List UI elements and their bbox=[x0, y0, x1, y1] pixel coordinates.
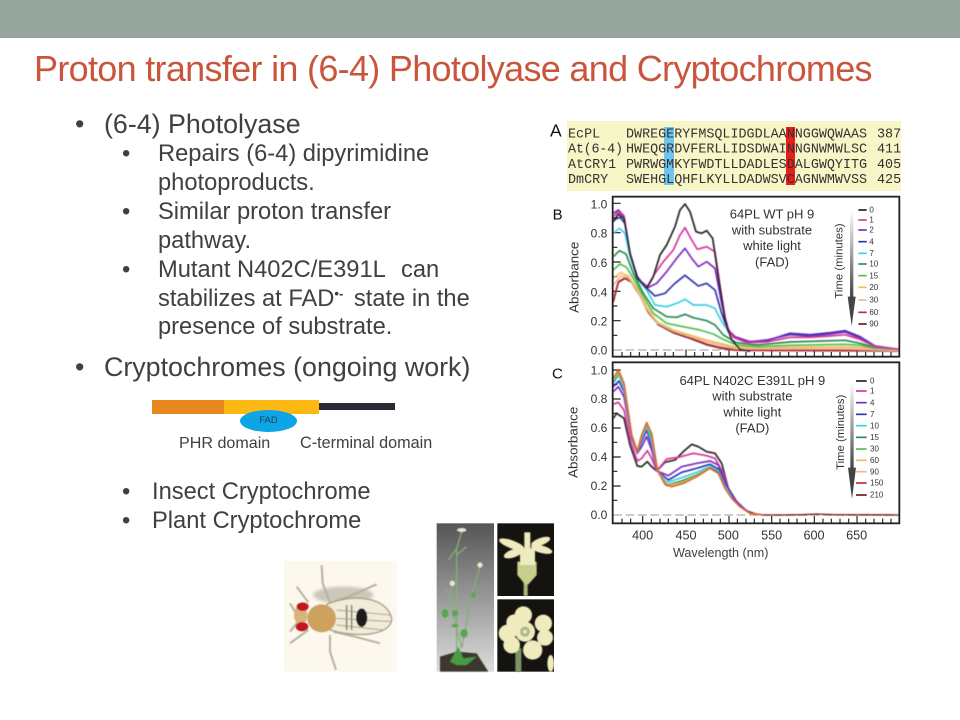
panel B: absorbance chart WT: 4 bbox=[869, 237, 874, 246]
panel C: absorbance chart mutant: 90 bbox=[870, 467, 879, 476]
panel B: absorbance chart WT: Absorbance bbox=[567, 242, 582, 313]
panel A: sequence alignment: DmCRY bbox=[568, 173, 608, 188]
panel A: sequence alignment: 405 bbox=[877, 158, 901, 173]
panel C: absorbance chart mutant bbox=[552, 361, 900, 542]
panel A: sequence alignment: PWRWGMKYFWDTLLDADLESDALGWQYITG bbox=[626, 158, 867, 173]
panel C: absorbance chart mutant: (FAD) bbox=[735, 421, 769, 436]
panel A: sequence alignment: SWEHGLQHFLKYLLDADWSVCAGNWMWVSS bbox=[626, 173, 867, 188]
plant whole bbox=[437, 523, 494, 672]
panel C: absorbance chart mutant: 10 bbox=[870, 421, 879, 430]
text block: (6-4) photolyase bullets: Mutant N402C/E391L can bbox=[158, 257, 439, 283]
panel B: absorbance chart WT: 0.2 bbox=[591, 315, 608, 329]
FAD ellipse: FAD bbox=[259, 415, 278, 426]
panel A: sequence alignment: EcPL bbox=[568, 128, 600, 142]
panel C: absorbance chart mutant: white light bbox=[722, 404, 782, 419]
panel C: absorbance chart mutant: 15 bbox=[870, 433, 879, 442]
text block: (6-4) photolyase bullets: Similar proton transfer bbox=[158, 199, 391, 225]
text block: (6-4) photolyase bullets: (6-4) Photolyase bbox=[104, 109, 301, 139]
panel C: absorbance chart mutant: 150 bbox=[870, 479, 884, 488]
text block: (6-4) photolyase bullets: Repairs (6-4) dipyrimidine bbox=[158, 141, 429, 167]
C-terminal bar bbox=[319, 403, 395, 410]
panel C: absorbance chart mutant: with substrate bbox=[711, 389, 792, 404]
panel C: absorbance chart mutant: 550 bbox=[761, 528, 782, 542]
flower top view bbox=[497, 599, 554, 672]
panel A: sequence alignment: AtCRY1 bbox=[568, 158, 616, 173]
panel B: absorbance chart WT: 15 bbox=[869, 271, 879, 280]
panel B: absorbance chart WT: Time (minutes) bbox=[833, 223, 845, 299]
panel C: absorbance chart mutant: 0 bbox=[870, 377, 875, 386]
panel B: absorbance chart WT: 0.4 bbox=[591, 285, 608, 299]
text block: cryptochromes heading: Cryptochromes (ongoing work) bbox=[104, 352, 470, 382]
panel A: sequence alignment: 387 bbox=[877, 128, 901, 142]
panel C: absorbance chart mutant: 0.6 bbox=[591, 421, 608, 435]
panel C: absorbance chart mutant: 60 bbox=[870, 456, 879, 465]
panel B: absorbance chart WT: 2 bbox=[869, 226, 874, 235]
panel A: sequence alignment: At(6-4) bbox=[568, 142, 623, 158]
title: Proton transfer in (6-4) Photolyase and Cryptochromes bbox=[34, 48, 872, 89]
x axis label: Wavelength (nm) bbox=[673, 546, 768, 560]
text block: cryptochrome types: • bbox=[122, 479, 130, 505]
panel C: absorbance chart mutant: 1.0 bbox=[591, 363, 608, 377]
panel B: absorbance chart WT: 64PL WT pH 9 bbox=[730, 207, 814, 222]
text block: (6-4) photolyase bullets: • bbox=[122, 199, 130, 225]
panel C: absorbance chart mutant: 500 bbox=[718, 528, 739, 542]
text block: (6-4) photolyase bullets: • bbox=[122, 141, 130, 167]
panel C: absorbance chart mutant: 1 bbox=[870, 387, 875, 396]
panel B: absorbance chart WT: 10 bbox=[869, 260, 879, 269]
panel B: absorbance chart WT: with substrate bbox=[731, 222, 812, 237]
PHR yellow segment bbox=[224, 400, 319, 414]
panel A: sequence alignment: 425 bbox=[877, 173, 901, 188]
text block: cryptochrome types: • bbox=[122, 508, 130, 534]
panel C: absorbance chart mutant: 0.0 bbox=[591, 508, 608, 522]
panel C: absorbance chart mutant: 210 bbox=[870, 491, 884, 500]
text block: cryptochrome types: Plant Cryptochrome bbox=[152, 508, 361, 534]
text block: (6-4) photolyase bullets: • bbox=[75, 109, 84, 139]
panel B: absorbance chart WT: 60 bbox=[869, 308, 879, 317]
panel C: absorbance chart mutant: Time (minutes) bbox=[835, 395, 847, 470]
panel B: absorbance chart WT: 30 bbox=[869, 296, 879, 305]
panel C: absorbance chart mutant: Absorbance bbox=[566, 407, 581, 478]
panel A: sequence alignment: HWEQGRDVFERLLIDSDWAINNGNWMWLSC bbox=[626, 142, 867, 158]
panel C: absorbance chart mutant: 450 bbox=[675, 528, 697, 542]
panel A: sequence alignment: 411 bbox=[877, 142, 901, 158]
panel B: absorbance chart WT: (FAD) bbox=[755, 255, 789, 270]
panel C: absorbance chart mutant: C bbox=[552, 365, 563, 382]
panel C: absorbance chart mutant: 0.8 bbox=[591, 392, 608, 406]
text block: cryptochrome types bbox=[122, 479, 371, 534]
panel B: absorbance chart WT: 0 bbox=[869, 206, 874, 215]
panel C: absorbance chart mutant: 30 bbox=[870, 445, 879, 454]
panel C: absorbance chart mutant: 650 bbox=[846, 528, 867, 542]
PHR orange segment bbox=[152, 400, 224, 414]
panel B: absorbance chart WT: 0.8 bbox=[591, 227, 608, 241]
panel B: absorbance chart WT bbox=[553, 196, 900, 358]
panel A: sequence alignment: DWREGERYFMSQLIDGDLAANNGGWQWAAS bbox=[626, 128, 867, 142]
flower side view bbox=[497, 523, 554, 596]
panel B: absorbance chart WT: 7 bbox=[869, 249, 874, 258]
panel B: absorbance chart WT: 1.0 bbox=[591, 197, 608, 211]
PHR label: PHR domain bbox=[179, 434, 270, 452]
text block: (6-4) photolyase bullets: stabilizes at FAD•- state in the bbox=[158, 286, 470, 312]
text block: cryptochrome types: Insect Cryptochrome bbox=[152, 479, 371, 505]
panel A: sequence alignment bbox=[550, 120, 901, 191]
panel C: absorbance chart mutant: 600 bbox=[803, 528, 825, 542]
panel B: absorbance chart WT: 0.0 bbox=[591, 344, 608, 358]
text block: cryptochromes heading: • bbox=[75, 352, 84, 382]
panel A: sequence alignment: A bbox=[550, 120, 562, 140]
text block: (6-4) photolyase bullets: photoproducts. bbox=[158, 170, 315, 196]
panel C: absorbance chart mutant: 0.4 bbox=[591, 450, 608, 464]
panel C: absorbance chart mutant: 7 bbox=[870, 410, 875, 419]
panel C: absorbance chart mutant: 400 bbox=[632, 528, 653, 542]
C-terminal label: C-terminal domain bbox=[300, 434, 432, 452]
text block: (6-4) photolyase bullets: presence of substrate. bbox=[158, 314, 392, 340]
domain diagram bbox=[152, 400, 432, 452]
photo: Arabidopsis plant panels bbox=[436, 523, 554, 672]
FAD ellipse bbox=[240, 410, 297, 432]
panel C: absorbance chart mutant: 64PL N402C E391L pH 9 bbox=[679, 373, 825, 388]
panel B: absorbance chart WT: 1 bbox=[869, 216, 874, 225]
panel C: absorbance chart mutant: 0.2 bbox=[591, 479, 608, 493]
panel B: absorbance chart WT: white light bbox=[742, 238, 801, 253]
text block: (6-4) photolyase bullets: • bbox=[122, 257, 130, 283]
panel B: absorbance chart WT: B bbox=[553, 206, 563, 223]
panel B: absorbance chart WT: 0.6 bbox=[591, 256, 608, 270]
panel B: absorbance chart WT: 20 bbox=[869, 283, 879, 292]
text block: (6-4) photolyase bullets: pathway. bbox=[158, 228, 251, 254]
panel B: absorbance chart WT: 90 bbox=[869, 320, 879, 329]
photo: fruit fly bbox=[284, 561, 396, 672]
text block: (6-4) photolyase bullets bbox=[75, 109, 470, 340]
header band bbox=[0, 0, 960, 38]
panel C: absorbance chart mutant: 4 bbox=[870, 398, 875, 407]
